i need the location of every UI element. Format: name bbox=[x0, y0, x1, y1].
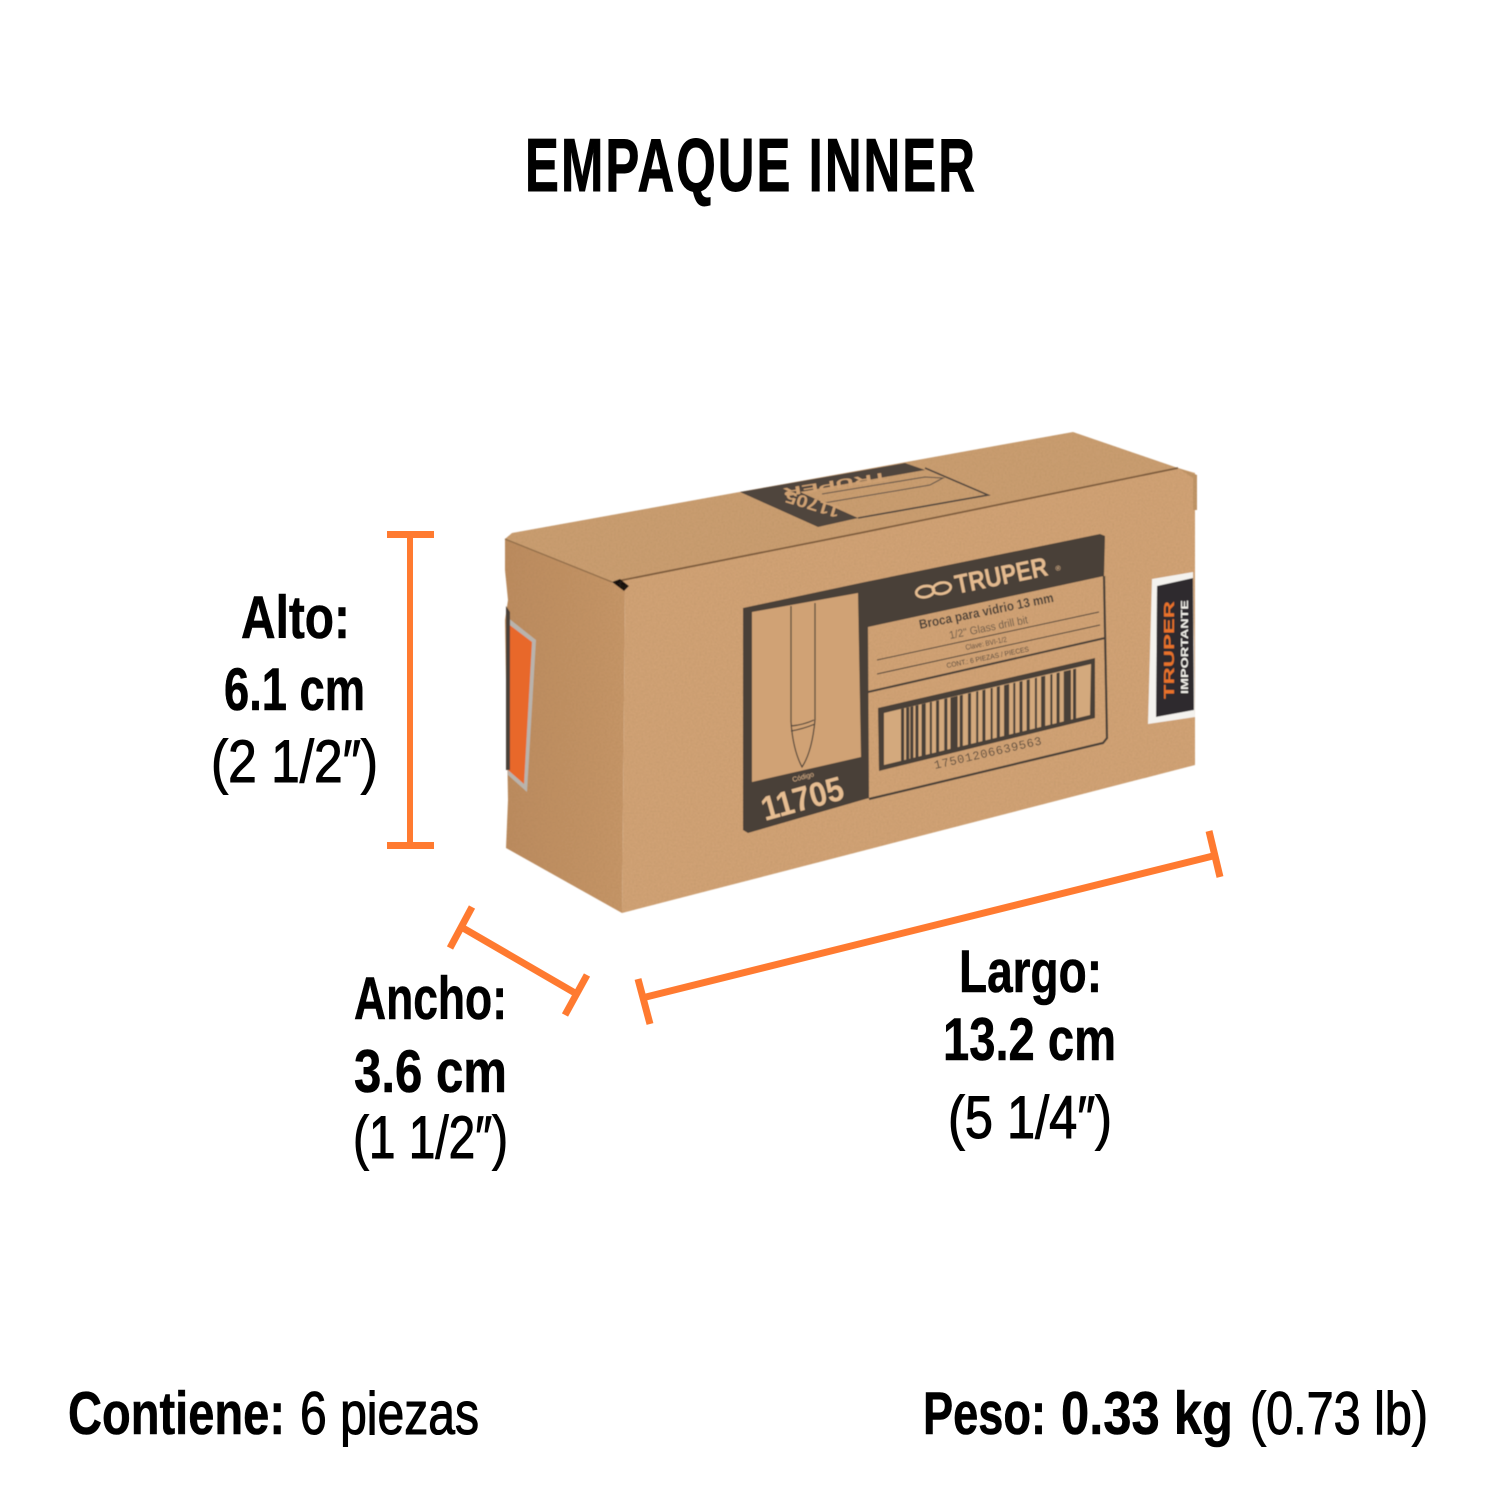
contents note bbox=[68, 1380, 479, 1447]
weight note bbox=[923, 1380, 1428, 1447]
box end flap bbox=[1178, 468, 1197, 510]
length label: (5 1/4″) bbox=[948, 1084, 1112, 1151]
height label bbox=[211, 584, 378, 795]
contents note: Contiene: bbox=[68, 1380, 285, 1447]
width label: Ancho: bbox=[354, 965, 507, 1032]
right side warning sticker bbox=[1148, 572, 1195, 724]
width label: (1 1/2″) bbox=[353, 1104, 508, 1171]
cardboard texture bbox=[614, 580, 627, 589]
title: EMPAQUE INNER bbox=[525, 123, 977, 207]
width dimension arrow bbox=[450, 907, 587, 1015]
width label bbox=[353, 965, 508, 1171]
label dark background bbox=[743, 534, 1105, 833]
clave text: Clave: BVI-1/2 bbox=[965, 635, 1008, 652]
weight note: Peso: bbox=[923, 1380, 1046, 1447]
product name: Broca para vidrio 13 mm bbox=[918, 590, 1055, 632]
top face printed label bbox=[740, 463, 988, 527]
product code: 11705 bbox=[757, 770, 848, 829]
top face printed label: TRUPER bbox=[781, 469, 889, 500]
height label: 6.1 cm bbox=[224, 656, 365, 723]
length label bbox=[943, 938, 1116, 1151]
barcode number: 17501206639563 bbox=[933, 735, 1043, 773]
product english name: 1/2" Glass drill bit bbox=[948, 614, 1029, 642]
box front face bbox=[618, 468, 1195, 913]
right side warning sticker: IMPORTANTE bbox=[1180, 600, 1191, 694]
length label: Largo: bbox=[959, 938, 1102, 1005]
label dividers bbox=[868, 612, 1105, 692]
box top face bbox=[505, 432, 1178, 582]
left side orange sticker bbox=[506, 606, 536, 792]
length label: 13.2 cm bbox=[943, 1006, 1116, 1073]
corner gap bbox=[612, 579, 629, 591]
box left face bbox=[505, 539, 625, 913]
cardboard box bbox=[500, 430, 1200, 920]
drill bit window bbox=[752, 593, 861, 782]
front printed label bbox=[743, 534, 1107, 833]
top face printed label: 11705 bbox=[783, 487, 842, 521]
code caption: Código bbox=[792, 771, 815, 784]
right side warning sticker: TRUPER bbox=[1161, 601, 1178, 699]
brand logo mark bbox=[915, 581, 952, 599]
height dimension arrow bbox=[387, 531, 434, 849]
drill bit drawing bbox=[791, 603, 815, 767]
left flap edge bbox=[505, 539, 612, 582]
contents text: CONT.: 6 PIEZAS / PIECES bbox=[946, 646, 1030, 670]
contents note: 6 piezas bbox=[300, 1380, 479, 1447]
infographic: inner package dimensions bbox=[70, 138, 1426, 1448]
registered mark: ® bbox=[1055, 564, 1062, 573]
barcode bbox=[878, 658, 1095, 771]
width label: 3.6 cm bbox=[354, 1038, 507, 1105]
length dimension arrow bbox=[638, 831, 1220, 1024]
lid fold shadow bbox=[618, 468, 1178, 581]
weight note: 0.33 kg bbox=[1061, 1380, 1233, 1447]
brand name: TRUPER bbox=[952, 552, 1050, 600]
label right outline bbox=[869, 576, 1107, 799]
weight note: (0.73 lb) bbox=[1250, 1380, 1428, 1447]
height label: Alto: bbox=[241, 584, 350, 651]
height label: (2 1/2″) bbox=[211, 728, 378, 795]
